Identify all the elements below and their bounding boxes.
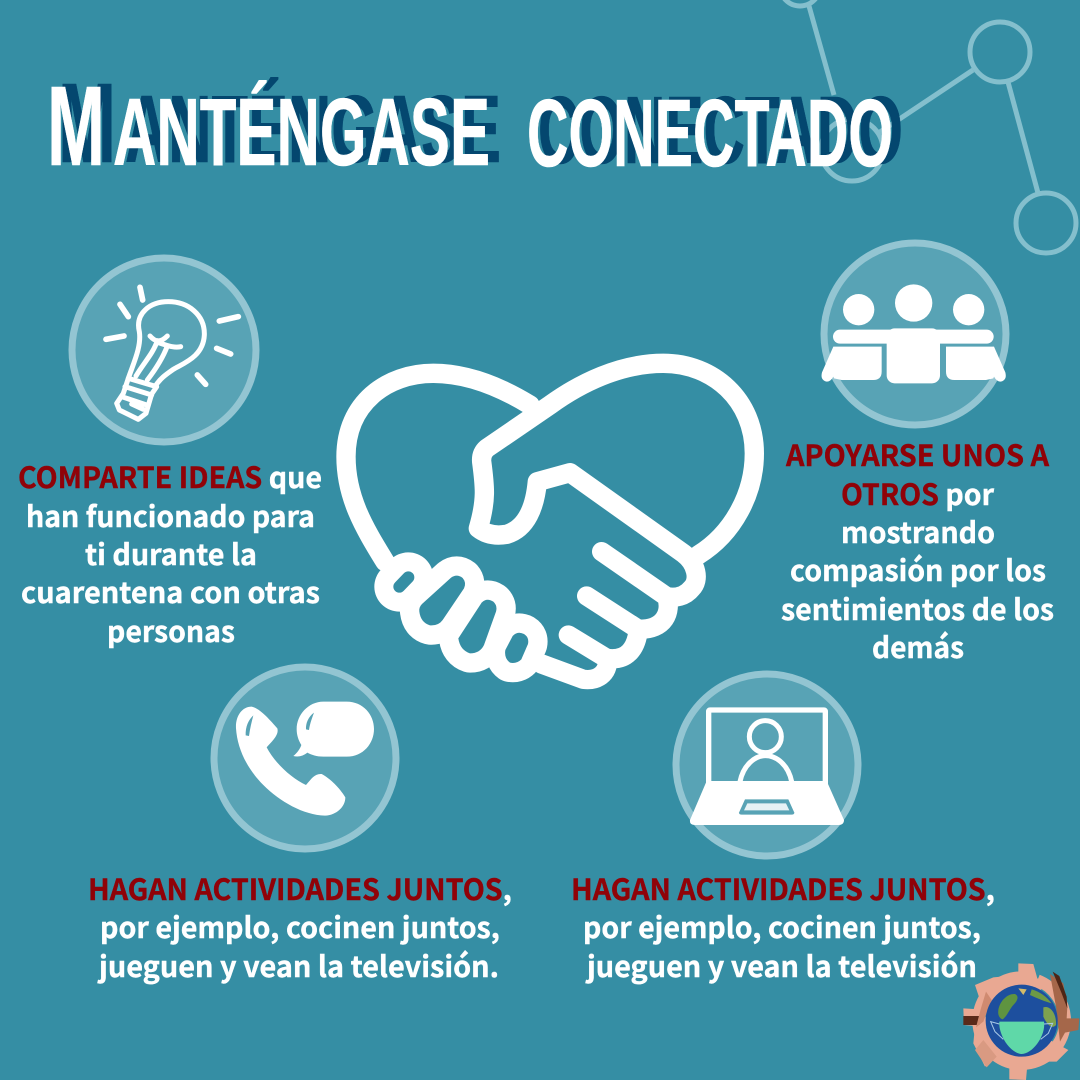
icon: phone and speech bubble in circle — [214, 667, 396, 849]
text: hagan actividades juntos left: HAGAN ACTIVIDADES JUNTOS, — [88, 867, 512, 909]
text: apoyarse unos a otros: demás — [872, 625, 964, 667]
text: hagan actividades juntos left: jueguen y vean la televisión. — [97, 944, 499, 986]
text: comparte ideas: personas — [107, 609, 235, 651]
title: ANTÉNGASE — [113, 79, 490, 186]
text: hagan actividades juntos left — [88, 867, 512, 986]
text: comparte ideas: cuarentena con otras — [21, 570, 320, 612]
text: hagan actividades juntos right: HAGAN ACTIVIDADES JUNTOS, — [571, 867, 995, 909]
icon: handshake heart — [346, 363, 754, 680]
title: M — [47, 63, 105, 189]
icon: laptop video call in circle — [676, 674, 858, 856]
text: hagan actividades juntos right: por ejemplo, cocinen juntos, — [583, 905, 981, 947]
text: apoyarse unos a otros: mostrando — [841, 510, 995, 552]
text: apoyarse unos a otros — [781, 433, 1054, 667]
network graphic — [780, 0, 1076, 253]
text: comparte ideas: ti durante la — [85, 532, 257, 574]
text: hagan actividades juntos right — [571, 867, 995, 986]
text: apoyarse unos a otros: OTROS por — [841, 472, 994, 514]
text: hagan actividades juntos left: por ejemplo, cocinen juntos, — [100, 905, 500, 947]
text: apoyarse unos a otros: compasión por los — [790, 548, 1046, 590]
icon: globe with mask logo — [963, 963, 1079, 1080]
text: hagan actividades juntos right: jueguen y vean la televisión — [585, 944, 977, 986]
title: ANTÉNGASE — [125, 76, 501, 183]
text: comparte ideas: COMPARTE IDEAS que — [18, 455, 322, 497]
text: comparte ideas — [18, 455, 322, 651]
finger holes — [399, 576, 528, 663]
text: apoyarse unos a otros: APOYARSE UNOS A — [785, 433, 1049, 475]
text: comparte ideas: han funcionado para — [26, 494, 315, 536]
text: apoyarse unos a otros: sentimientos de los — [781, 587, 1054, 629]
icon: three people in circle — [822, 243, 1006, 425]
icon: lightbulb in circle — [72, 258, 256, 442]
title: M — [58, 60, 116, 186]
title — [47, 60, 903, 189]
left hand fingers outline — [399, 576, 528, 663]
